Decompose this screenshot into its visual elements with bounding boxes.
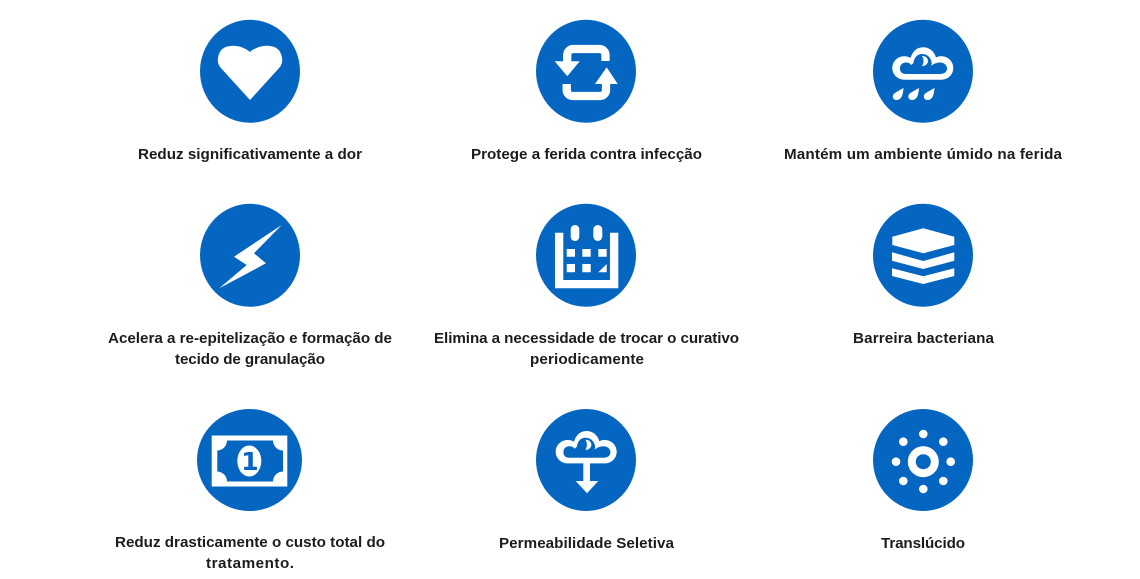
icon: lightning bolt [200,204,300,307]
icon: heart [200,20,300,123]
label: Permeabilidade Seletiva [499,535,675,552]
label: Protege a ferida contra infecção [471,146,702,163]
label [115,534,385,572]
item: protects against infection [471,20,702,163]
icon: sun [873,409,973,511]
item: selective permeability [499,409,675,552]
label: Mantém um ambiente úmido na ferida [784,146,1063,163]
icon: banknote: 1 [241,447,259,476]
label [434,330,739,368]
label: Barreira bacteriana [853,330,995,347]
label: tratamento. [206,555,294,572]
label: tecido de granulação [175,351,325,368]
icon: cloud with down arrow [536,409,636,511]
label: Acelera a re-epitelização e formação de [108,330,392,347]
icon: layers [873,204,973,307]
item: reduces total cost [115,409,385,572]
label: periodicamente [530,351,644,368]
label: Translúcido [881,535,965,552]
icon: refresh arrows [536,20,636,123]
label [108,330,392,368]
item: moist environment [784,20,1063,163]
item: reduces pain [138,20,362,163]
item: bacterial barrier [853,204,995,347]
item: translucent [873,409,973,552]
icon: rain cloud [873,20,973,123]
icon: banknote [197,409,302,511]
label: Reduz drasticamente o custo total do [115,534,385,551]
item: no periodic dressing change [434,204,739,368]
item: accelerates re-epithelialization [108,204,392,368]
label: Reduz significativamente a dor [138,146,362,163]
icon: calendar [536,204,636,307]
label: Elimina a necessidade de trocar o curativo [434,330,739,347]
